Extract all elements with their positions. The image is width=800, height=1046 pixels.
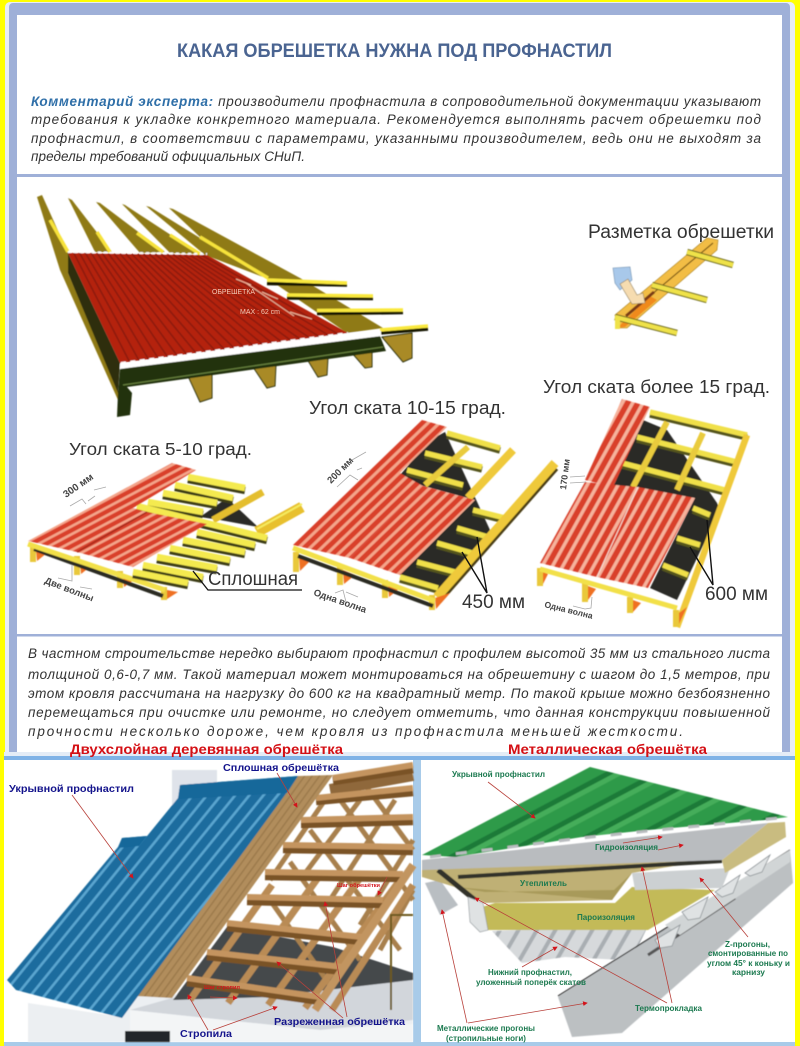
front gable rafter: [315, 865, 413, 1010]
silver purlin block: [632, 868, 730, 890]
thermal strips: [438, 861, 722, 900]
dimension labels: [544, 458, 594, 621]
posts and beam: [28, 544, 178, 600]
rafter tails: [188, 333, 412, 402]
labels: [9, 762, 405, 1040]
label: 450 mm: 450 мм: [462, 592, 525, 613]
back trusses: [270, 775, 413, 985]
dimension labels on sheet: MAX : 62 cm: [240, 309, 280, 316]
panel: double-layer wooden battens: [4, 760, 413, 1042]
lower text block: прочности несколько дороже, чем кровля из профнастила меньшей жесткости.: [28, 724, 683, 739]
eave beam: [117, 331, 386, 417]
labels: Металлические прогоны: [437, 1023, 535, 1033]
dimension labels on sheet: ОБРЕШЕТКА: [212, 289, 255, 296]
z-purlin ribs: [655, 855, 770, 948]
expert comment text block: профнастил, в соответствии с параметрами, указанными производителем, ведь они не выходят за: [31, 131, 761, 146]
diagram: slope 5-10 degrees, solid sheathing: [28, 463, 302, 604]
diagram: slope 10-15 degrees, 450 mm pitch: [293, 420, 557, 616]
heading: slope 5-10: Угол ската 5-10 град.: [69, 439, 252, 459]
lower text block: [28, 646, 770, 739]
expert comment text block: Комментарий эксперта: производители профнастила в сопроводительной документации указывают: [31, 94, 761, 109]
red sheets: [293, 420, 475, 575]
heading: slope 10-15: Угол ската 10-15 град.: [309, 398, 506, 418]
rafters: [37, 195, 383, 400]
expert comment text block: требования к укладке конкретного материала. Рекомендуется выполнять расчет обрешетки под: [31, 112, 762, 127]
labels: Нижний профнастил,: [488, 967, 572, 977]
left purlin: [425, 880, 458, 915]
labels: [437, 769, 790, 1043]
dark interior: [173, 927, 413, 1000]
panel: metal battens: [421, 760, 795, 1043]
illustration: large roof with corrugated sheet: [37, 195, 428, 417]
membrane: [422, 823, 768, 870]
dimension labels: 300 мм: [61, 472, 96, 500]
sparse battens: [187, 765, 413, 1001]
underlay: [613, 420, 720, 600]
battens: [400, 433, 505, 590]
insulation: [422, 822, 786, 903]
label: 600 mm: [690, 520, 768, 605]
rafters: [190, 875, 413, 1010]
labels: Утеплитель: [520, 878, 567, 888]
labels: Гидроизоляция: [595, 842, 658, 852]
leaders: [442, 782, 748, 1023]
dimension labels: Одна волна: [312, 587, 368, 616]
title: КАКАЯ ОБРЕШЕТКА НУЖНА ПОД ПРОФНАСТИЛ: [177, 40, 612, 62]
heading: layout marking: Разметка обрешетки: [588, 222, 774, 243]
labels: Укрывной профнастил: [452, 769, 545, 779]
dimension labels: 200 мм: [325, 455, 356, 486]
heading: metal battens: Металлическая обрешётка: [508, 741, 707, 757]
red sheets: [28, 463, 207, 567]
expert comment text block: пределы требований официальных СНиП.: [31, 149, 305, 164]
labels: Пароизоляция: [577, 912, 635, 922]
labels: Сплошная обрешётка: [223, 762, 339, 774]
overhanging battens: [267, 280, 428, 333]
diagram: slope over 15 degrees, 600 mm pitch: [540, 399, 768, 627]
solid boarding: [136, 775, 333, 998]
labels: уложенный поперёк скатов: [476, 977, 586, 987]
illustration: marking the battens by hand: [613, 238, 733, 333]
lower text block: перемещаться при очистке или ремонте, но следует отметить, что данная конструкции повышенной: [28, 705, 770, 720]
door frame: [391, 915, 413, 1010]
labels: Термопрокладка: [635, 1003, 702, 1013]
blue corrugated sheet: [7, 776, 298, 1018]
corrugated sheet: [68, 252, 348, 393]
label: 600 mm: 600 мм: [705, 584, 768, 605]
z stub: [468, 897, 488, 932]
heading: slope over 15: Угол ската более 15 град.: [543, 377, 770, 397]
battens and rafters: [540, 412, 747, 627]
dimension labels on sheet: [212, 289, 280, 316]
labels: Разреженная обрешётка: [274, 1016, 405, 1028]
label: 450 mm: [462, 537, 525, 613]
rafters: [293, 450, 557, 610]
lower text block: В частном строительстве нередко выбирают профнастил с профилем высотой 35 мм из стального листа: [28, 646, 770, 661]
green sheet: [422, 767, 788, 857]
solid boards: [133, 477, 267, 586]
labels: Шаг стропил: [204, 985, 240, 991]
dimension labels: [43, 472, 106, 604]
heading: wooden battens: Двухслойная деревянная обрешётка: [70, 741, 343, 757]
lower text block: этом кровля рассчитана на нагрузку до 600 кг на квадратный метр. По такой крыше можно безбоязненно: [28, 686, 770, 701]
dimension labels: Одна волна: [544, 599, 594, 621]
lower text block: толщиной 0,6-0,7 мм. Такой материал может монтироваться на обрешетину с шагом до 1,5 метров, при: [28, 667, 770, 682]
dimension labels: [312, 452, 368, 616]
labels: Стропила: [180, 1029, 232, 1040]
dimension labels: Две волны: [43, 576, 95, 604]
lower corrugated deck: [492, 926, 648, 963]
large I-beam: [558, 850, 793, 1037]
labels: (стропильные ноги): [446, 1033, 526, 1043]
labels: смонтированные по: [708, 948, 788, 958]
labels: Z-прогоны,: [725, 939, 770, 949]
labels: Шаг обрешётки: [337, 882, 380, 889]
label: solid: Сплошная: [208, 569, 298, 590]
dimension labels: 170 мм: [558, 458, 572, 490]
underlay: [400, 432, 490, 590]
rafters and underlay: [200, 492, 302, 532]
red sheets: [540, 399, 695, 588]
labels: Укрывной профнастил: [9, 783, 134, 795]
labels: карнизу: [732, 967, 765, 977]
labels: углом 45° к коньку и: [707, 958, 790, 968]
vapour barrier: [482, 887, 715, 930]
expert comment text block: [31, 94, 762, 164]
leaders: [72, 773, 387, 1030]
building and chimney: [28, 770, 413, 1042]
